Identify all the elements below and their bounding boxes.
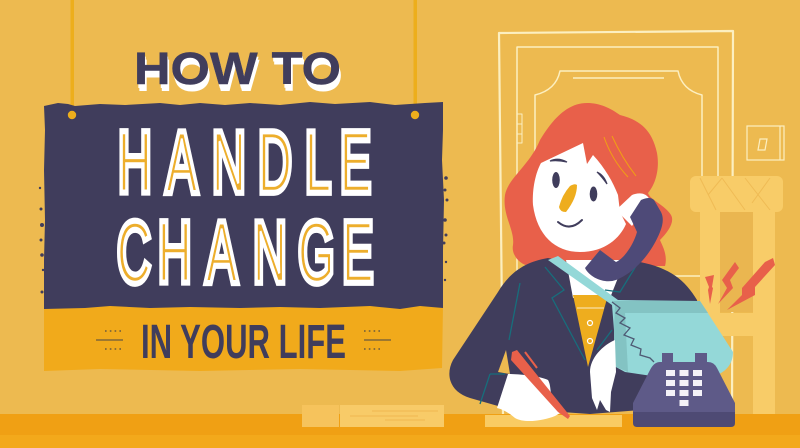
telephone xyxy=(633,353,735,427)
papers on table xyxy=(302,405,622,427)
heading: HANDLE: HANDLE xyxy=(118,115,371,210)
stool xyxy=(690,176,783,415)
heading: CHANGE: CHANGE xyxy=(117,205,373,300)
table xyxy=(0,414,800,448)
face xyxy=(533,143,626,252)
heading: HOW TO: HOW TO xyxy=(136,50,343,101)
wall gap between arm and torso xyxy=(498,350,510,374)
heading: HOW TO: HOW TO xyxy=(135,47,342,98)
phone cord xyxy=(612,302,654,362)
yellow sign band xyxy=(44,305,443,371)
left ornament xyxy=(96,331,123,349)
string holes xyxy=(68,111,419,119)
shirt and vest xyxy=(566,260,625,298)
heading: HOW TO: HOW TO xyxy=(134,43,341,94)
shoulder bag xyxy=(548,256,733,376)
door outline xyxy=(499,31,733,414)
hanging strings xyxy=(70,0,417,115)
light switch xyxy=(747,126,784,160)
right ornament xyxy=(364,331,391,349)
character: woman on phone xyxy=(449,103,733,421)
heading: HANDLE: HANDLE xyxy=(118,115,371,210)
hair strands xyxy=(604,136,636,177)
subheading: IN YOUR LIFE: IN YOUR LIFE xyxy=(141,316,346,369)
keypad xyxy=(666,370,702,406)
heading: CHANGE: CHANGE xyxy=(117,205,373,300)
hand holding handset xyxy=(616,193,650,226)
dark hanging sign xyxy=(44,102,444,309)
pen xyxy=(511,350,570,419)
vest buttons xyxy=(577,308,604,344)
right hand xyxy=(590,340,616,412)
eyes and brows xyxy=(550,159,607,202)
jacket seams xyxy=(480,266,636,404)
jacket xyxy=(449,258,700,414)
lightning bolts xyxy=(705,258,775,310)
handset xyxy=(585,198,663,281)
writing hand xyxy=(497,374,562,421)
smile xyxy=(558,220,582,227)
speckled sign edges xyxy=(39,176,449,294)
nose xyxy=(559,184,577,212)
hair xyxy=(505,103,672,266)
